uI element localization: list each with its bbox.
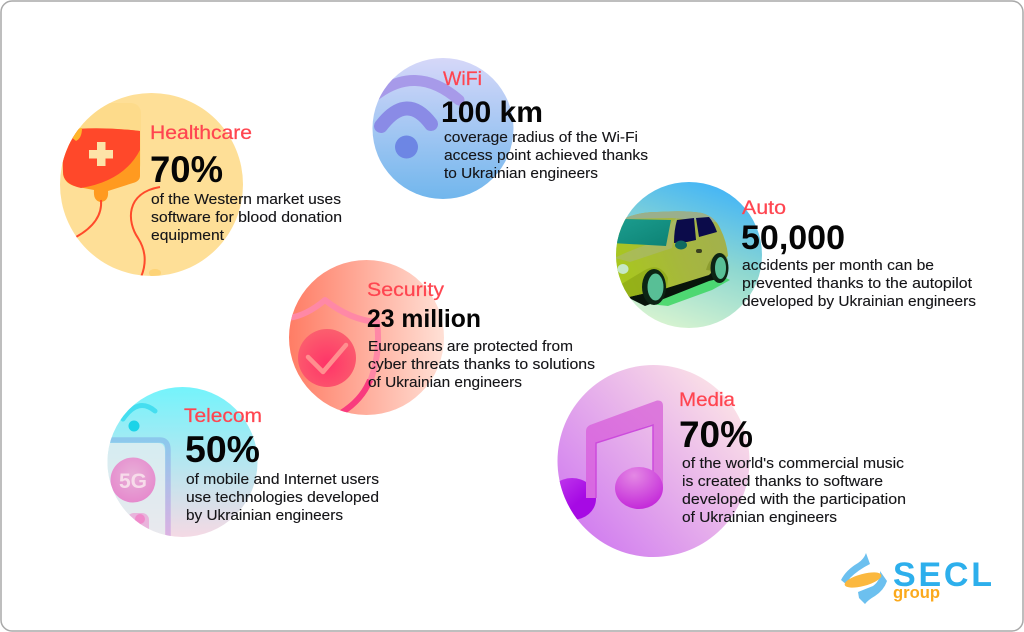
telecom illustration: 5G — [119, 470, 147, 493]
auto description — [742, 257, 976, 310]
healthcare description — [151, 191, 342, 244]
security figure: 23 million — [367, 305, 481, 333]
logo subtitle: group — [893, 583, 940, 602]
telecom description: of mobile and Internet users — [186, 471, 379, 488]
auto heading: Auto — [742, 197, 786, 219]
security description: cyber threats thanks to solutions — [368, 356, 595, 373]
media description: developed with the participation — [682, 491, 906, 508]
logo: SECL group — [841, 553, 992, 604]
panel: wifi — [370, 55, 648, 205]
panel: healthcare — [55, 90, 342, 280]
logo wordmark: SECL — [893, 556, 992, 594]
healthcare figure: 70% — [150, 149, 223, 190]
media description: of Ukrainian engineers — [682, 509, 837, 526]
security heading: Security — [367, 279, 444, 301]
auto description: developed by Ukrainian engineers — [742, 293, 976, 310]
auto figure: 50,000 — [741, 219, 845, 257]
telecom heading: Telecom — [184, 405, 262, 427]
media figure: 70% — [679, 414, 753, 455]
healthcare description: software for blood donation — [151, 209, 342, 226]
auto description: prevented thanks to the autopilot — [742, 275, 973, 292]
panel: security — [285, 255, 595, 420]
healthcare illustration — [60, 93, 243, 276]
wifi description: coverage radius of the Wi-Fi — [444, 129, 638, 146]
logo icon: ribbon — [841, 553, 887, 604]
security illustration — [289, 260, 444, 415]
telecom illustration — [105, 385, 260, 540]
media heading: Media — [679, 389, 735, 411]
auto illustration — [616, 182, 762, 328]
telecom figure: 50% — [185, 429, 260, 470]
media illustration — [548, 362, 751, 560]
security description — [368, 338, 595, 391]
security description: Europeans are protected from — [368, 338, 573, 355]
auto description: accidents per month can be — [742, 257, 934, 274]
wifi figure: 100 km — [441, 96, 543, 129]
wifi illustration — [372, 58, 514, 199]
wifi description: access point achieved thanks — [444, 147, 648, 164]
telecom description: by Ukrainian engineers — [186, 507, 343, 524]
telecom description: use technologies developed — [186, 489, 379, 506]
healthcare description: equipment — [151, 227, 225, 244]
wifi heading: WiFi — [443, 68, 482, 90]
panel: auto — [612, 178, 976, 333]
security description: of Ukrainian engineers — [368, 374, 522, 391]
media description: of the world's commercial music — [682, 455, 905, 472]
healthcare description: of the Western market uses — [151, 191, 341, 208]
wifi description — [444, 129, 648, 182]
panel: telecom — [105, 385, 379, 540]
panel: media — [548, 362, 906, 560]
wifi description: to Ukrainian engineers — [444, 165, 598, 182]
telecom description — [186, 471, 379, 524]
media description — [682, 455, 906, 526]
media description: is created thanks to software — [682, 473, 883, 490]
healthcare heading: Healthcare — [150, 122, 252, 144]
